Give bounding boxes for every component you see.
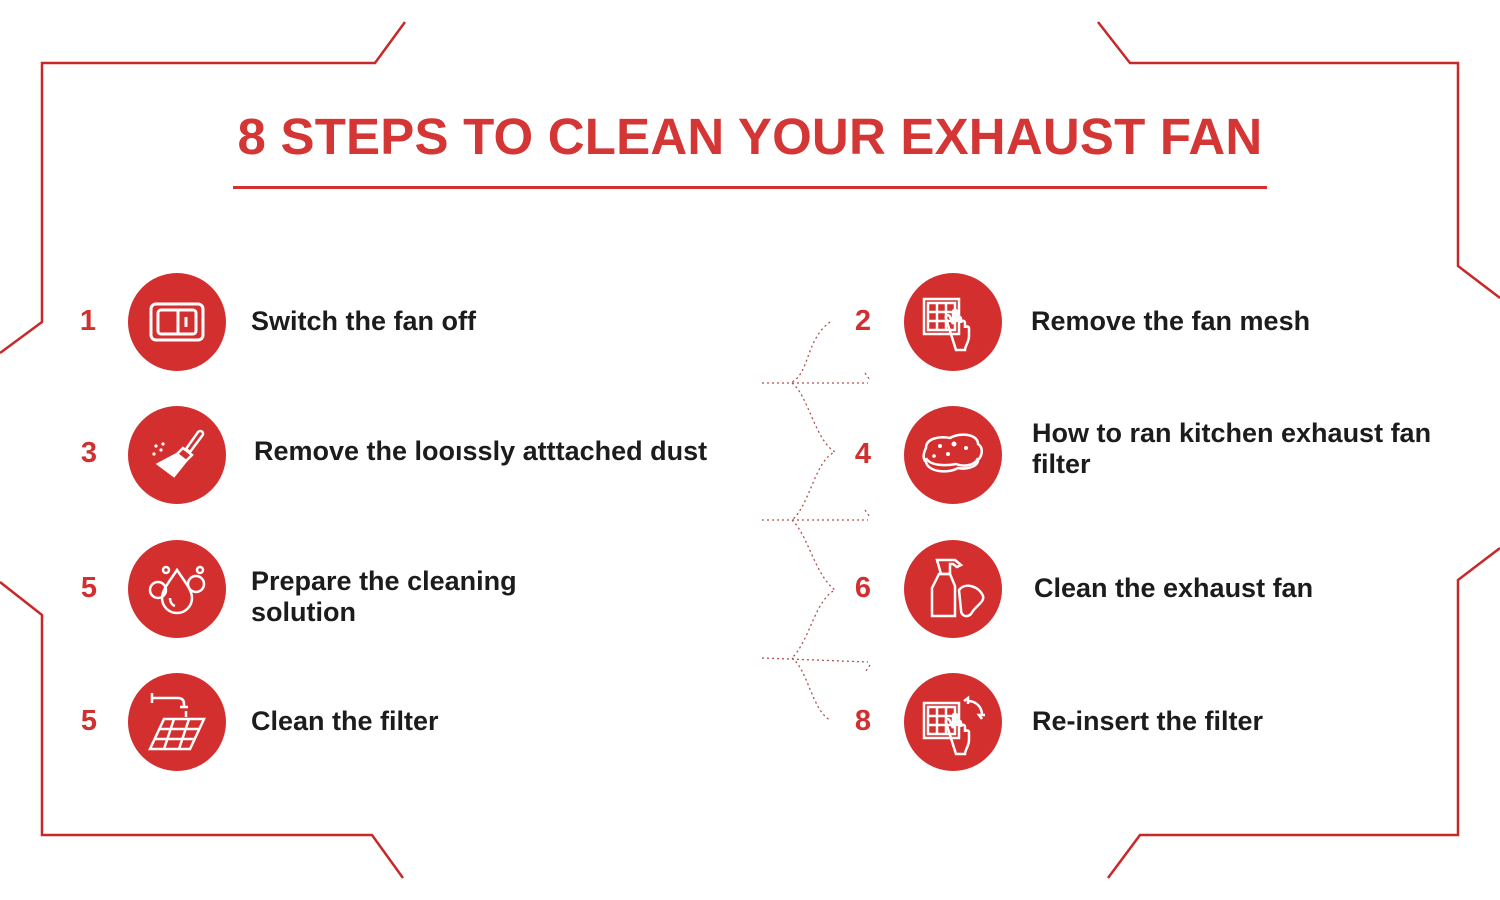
step 8: 8 [855, 705, 871, 737]
icon: spray bottle [904, 540, 1002, 638]
icon: brush [128, 406, 226, 504]
step 6: 6 [855, 572, 871, 604]
step 1: 1 [80, 305, 96, 337]
step 6 [855, 540, 1313, 638]
step 1 [80, 273, 476, 371]
step 2: Remove the fan mesh [1031, 306, 1310, 336]
icon: switch [128, 273, 226, 371]
step 2: 2 [855, 305, 871, 337]
step 2 [855, 273, 1310, 371]
step 1: Switch the fan off [251, 306, 476, 336]
title: 8 STEPS TO CLEAN YOUR EXHAUST FAN [238, 108, 1262, 165]
step 5: solution [251, 597, 356, 627]
icon: sponge [904, 406, 1002, 504]
step 3 [81, 406, 707, 504]
icon: re-insert [904, 673, 1002, 771]
step 4: filter [1032, 449, 1091, 479]
step 4: How to ran kitchen exhaust fan [1032, 418, 1431, 448]
step 5: 5 [81, 572, 97, 604]
step 7: 5 [81, 705, 97, 737]
step 6: Clean the exhaust fan [1034, 573, 1313, 603]
icon: tap and filter [128, 673, 226, 771]
step 3: 3 [81, 437, 97, 469]
step 3: Remove the looıssly atttached dust [254, 436, 707, 466]
step 8: Re-insert the filter [1032, 706, 1263, 736]
step 4: 4 [855, 438, 871, 470]
icon: water drop [128, 540, 226, 638]
icon: mesh hand [904, 273, 1002, 371]
step 7 [81, 673, 439, 771]
step 4 [855, 406, 1431, 504]
step 7: Clean the filter [251, 706, 439, 736]
step 5 [81, 540, 517, 638]
title underline [233, 186, 1267, 189]
step 8 [855, 673, 1263, 771]
step 5: Prepare the cleaning [251, 566, 517, 596]
